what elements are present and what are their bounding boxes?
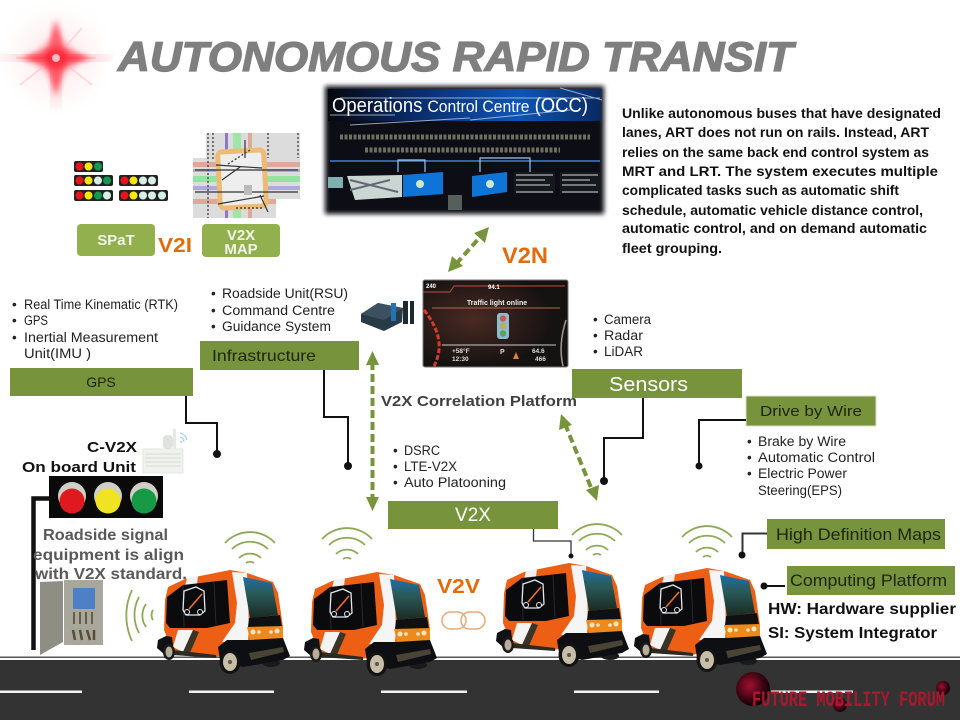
panel: GPS	[10, 297, 221, 458]
icon: roadside unit router	[361, 301, 414, 331]
wireless signal: bus 2	[322, 528, 372, 559]
GPS bullet list: Unit(IMU )	[24, 346, 91, 361]
drive by wire bullet list: •	[747, 434, 752, 449]
hardware and integrator note: HW: Hardware supplier	[768, 601, 956, 618]
icon: on board unit	[143, 429, 187, 473]
computing platform connector	[760, 582, 785, 590]
panel: in-vehicle dashboard: 64.6	[532, 348, 545, 355]
V2I label: V2I	[158, 235, 192, 257]
GPS bullet list: GPS	[24, 313, 48, 328]
V2X bullet list: DSRC	[404, 443, 440, 458]
V2X MAP label: MAP	[224, 241, 258, 258]
drive by wire label	[746, 396, 876, 426]
drive by wire bullet list: Brake by Wire	[758, 434, 846, 449]
paragraph: ART description: Unlike autonomous buses that have designated	[622, 106, 941, 121]
GPS bullet list: Inertial Measurement	[24, 330, 158, 345]
GPS bullet list: Real Time Kinematic (RTK)	[24, 297, 178, 312]
roadside signal text: with V2X standard.	[34, 566, 187, 583]
drive by wire label: Drive by Wire	[760, 403, 862, 420]
icon: V2X intersection map	[193, 133, 300, 218]
icon: traffic signal on pole	[34, 476, 163, 650]
wireless signal: bus 1	[225, 532, 275, 563]
panel: in-vehicle dashboard: P	[500, 349, 505, 356]
icon: red light flare	[0, 0, 114, 116]
icon: chain link	[442, 612, 485, 629]
bus 2	[304, 572, 437, 676]
GPS bullet list: •	[12, 330, 17, 345]
infrastructure label	[200, 341, 359, 370]
arrow: OCC to platform	[448, 227, 489, 272]
title: AUTONOMOUS RAPID TRANSIT	[117, 33, 797, 80]
panel: in-vehicle dashboard: 466	[535, 356, 546, 363]
panel: in-vehicle dashboard	[423, 280, 568, 367]
infrastructure label: Infrastructure	[212, 348, 316, 365]
drive by wire bullet list: Steering(EPS)	[758, 483, 842, 498]
V2N label: V2N	[502, 243, 548, 268]
V2X bullet list: •	[393, 475, 398, 490]
drive by wire bullet list: •	[747, 450, 752, 465]
infrastructure bullet list: Command Centre	[222, 303, 335, 318]
panel: infrastructure	[200, 286, 359, 470]
sensors bullet list	[593, 312, 651, 359]
paragraph: ART description: MRT and LRT. The system executes multiple	[622, 164, 939, 179]
infrastructure bullet list	[211, 286, 348, 334]
drive by wire bullet list: Electric Power	[758, 466, 848, 481]
V2X MAP label	[202, 224, 280, 258]
C-V2X on board unit label: On board Unit	[22, 459, 136, 476]
roadside signal text	[33, 527, 187, 583]
bus 1	[157, 570, 290, 674]
panel: V2X	[388, 443, 574, 558]
paragraph: ART description: complicated tasks such as automatic shift	[622, 183, 900, 198]
paragraph: ART description: schedule, automatic vehicle distance control,	[622, 203, 923, 218]
paragraph: ART description: automatic control, and on demand automatic	[622, 221, 928, 236]
sensors label: Sensors	[609, 374, 688, 396]
HD maps connector	[738, 534, 767, 558]
sensors bullet list: Camera	[604, 312, 651, 327]
GPS label	[10, 368, 193, 396]
arrow: infrastructure to V2X	[366, 351, 379, 511]
infrastructure bullet list: Roadside Unit(RSU)	[222, 286, 348, 301]
paragraph: ART description: lanes, ART does not run on rails. Instead, ART	[622, 125, 930, 140]
panel: in-vehicle dashboard: Traffic light online	[467, 300, 527, 307]
V2X correlation platform label: V2X Correlation Platform	[381, 393, 577, 410]
paragraph: ART description: fleet grouping.	[622, 241, 722, 256]
SPaT label: SPaT	[97, 232, 135, 249]
V2V label: V2V	[437, 576, 481, 598]
infrastructure bullet list: •	[211, 319, 216, 334]
wireless signal: bus 3	[572, 524, 622, 555]
bus 3	[496, 563, 629, 667]
paragraph: ART description: relies on the same back end control system as	[622, 145, 929, 160]
panel: in-vehicle dashboard: 12:30	[452, 356, 469, 363]
roadside signal text: equipment is align	[33, 547, 184, 564]
wireless signal: bus 4	[682, 526, 732, 557]
computing platform label	[787, 566, 955, 595]
V2X bullet list: Auto Platooning	[404, 475, 506, 490]
hardware and integrator note	[768, 601, 956, 642]
V2X label	[388, 501, 558, 529]
paragraph: ART description	[622, 106, 941, 256]
V2X label: V2X	[455, 505, 491, 526]
panel: in-vehicle dashboard: 240	[426, 284, 437, 290]
SPaT label	[77, 224, 155, 256]
sensors label	[572, 369, 742, 398]
sensors bullet list: •	[593, 344, 598, 359]
V2X connector	[534, 529, 574, 558]
OCC label: Operations Control Centre (OCC)	[332, 95, 588, 117]
sensors bullet list: LiDAR	[604, 344, 643, 359]
C-V2X on board unit label	[22, 439, 137, 476]
drive by wire connector	[696, 420, 746, 470]
roadside signal text: Roadside signal	[43, 527, 168, 544]
GPS bullet list	[12, 297, 178, 361]
icon: wireless signal from cabinet to bus	[126, 590, 153, 641]
GPS bullet list: •	[12, 313, 17, 328]
panel: sensors	[572, 312, 742, 485]
infrastructure connector	[324, 370, 352, 470]
V2X bullet list: LTE-V2X	[404, 459, 457, 474]
GPS connector	[186, 396, 221, 458]
V2X bullet list: •	[393, 443, 398, 458]
infrastructure bullet list: •	[211, 303, 216, 318]
panel: in-vehicle dashboard: +58°F	[452, 347, 470, 355]
drive by wire bullet list: •	[747, 466, 752, 481]
V2X bullet list	[393, 443, 506, 490]
drive by wire bullet list: Automatic Control	[758, 450, 875, 465]
GPS label: GPS	[86, 374, 116, 390]
V2X bullet list: •	[393, 459, 398, 474]
road	[0, 656, 960, 720]
icon: SPaT signal phase indicators	[74, 161, 168, 201]
C-V2X on board unit label: C-V2X	[87, 439, 137, 456]
HD maps label: High Definition Maps	[776, 526, 941, 544]
infrastructure bullet list: •	[211, 286, 216, 301]
bus 4	[634, 568, 767, 672]
panel: operations control centre photo	[325, 86, 604, 214]
sensors bullet list: Radar	[604, 328, 644, 343]
sensors bullet list: •	[593, 312, 598, 327]
panel: drive by wire	[696, 396, 876, 498]
sensors bullet list: •	[593, 328, 598, 343]
GPS bullet list: •	[12, 297, 17, 312]
arrow: platform to bus	[559, 414, 599, 501]
icon: roadside signal cabinet	[40, 580, 103, 655]
panel: in-vehicle dashboard: 94.1	[488, 285, 500, 291]
computing platform label: Computing Platform	[790, 572, 947, 590]
logo: future mobility forum	[736, 672, 950, 713]
infrastructure bullet list: Guidance System	[222, 319, 331, 334]
drive by wire bullet list	[747, 434, 875, 498]
V2X MAP label: V2X	[227, 227, 255, 244]
hardware and integrator note: SI: System Integrator	[768, 625, 937, 642]
sensors connector	[600, 398, 643, 485]
HD maps label	[767, 519, 945, 549]
